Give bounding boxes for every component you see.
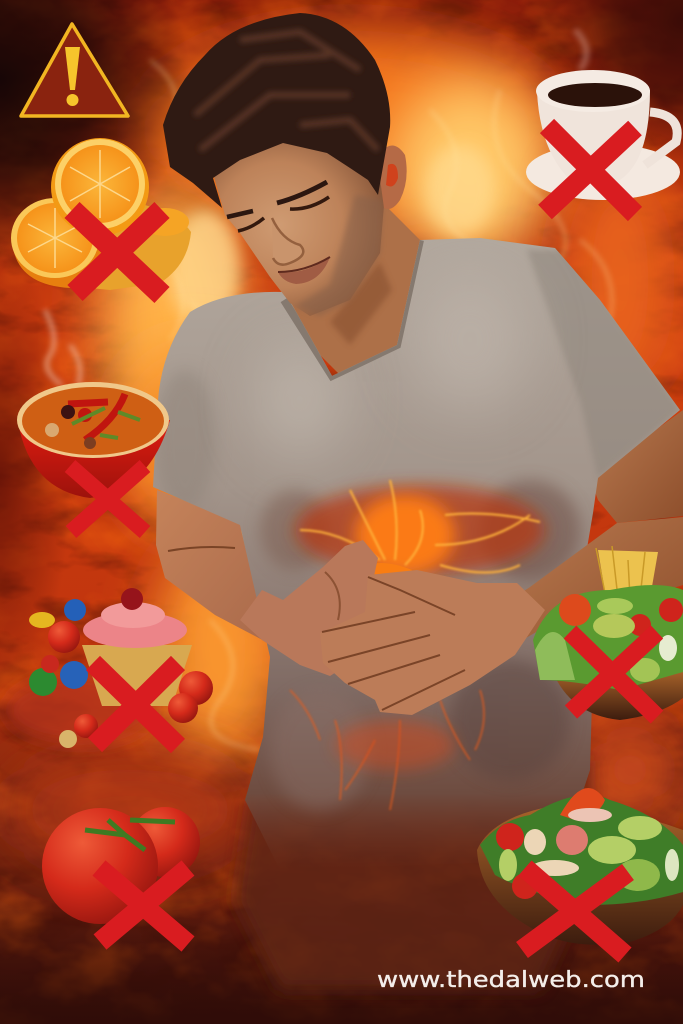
head — [163, 13, 407, 316]
nose — [272, 218, 303, 265]
cross: salad with pasta — [570, 632, 657, 717]
eyebrows and eyes — [227, 211, 253, 217]
fading legs — [235, 760, 590, 990]
ear — [377, 145, 407, 209]
belly fire glow — [290, 480, 545, 810]
food: salad bowl — [477, 788, 683, 945]
food: oranges — [11, 138, 191, 290]
food: coffee cup — [526, 30, 680, 200]
cross: curry — [70, 466, 145, 532]
forearm and hands — [240, 517, 683, 715]
food: salad with pasta — [533, 546, 683, 720]
icon: warning sign — [21, 24, 128, 116]
background gap beside the waist — [241, 530, 268, 590]
cross: oranges — [72, 210, 162, 295]
food: curry bowl — [17, 310, 170, 498]
neck — [285, 205, 422, 380]
cross: salad bowl — [522, 868, 628, 955]
food: tomatoes — [42, 807, 200, 924]
hair — [163, 13, 390, 208]
food: cupcake and candies — [5, 588, 213, 748]
man — [140, 13, 683, 990]
website url: www.thedalweb.com — [377, 967, 645, 993]
cross: cupcake — [93, 663, 178, 746]
flame wisps — [150, 60, 612, 750]
cross: tomatoes — [99, 868, 188, 944]
t-shirt — [140, 230, 683, 870]
cross: coffee — [545, 126, 635, 214]
upper arm, viewer left — [156, 490, 282, 645]
mouth — [278, 257, 330, 284]
upper arm, viewer right — [590, 410, 683, 523]
